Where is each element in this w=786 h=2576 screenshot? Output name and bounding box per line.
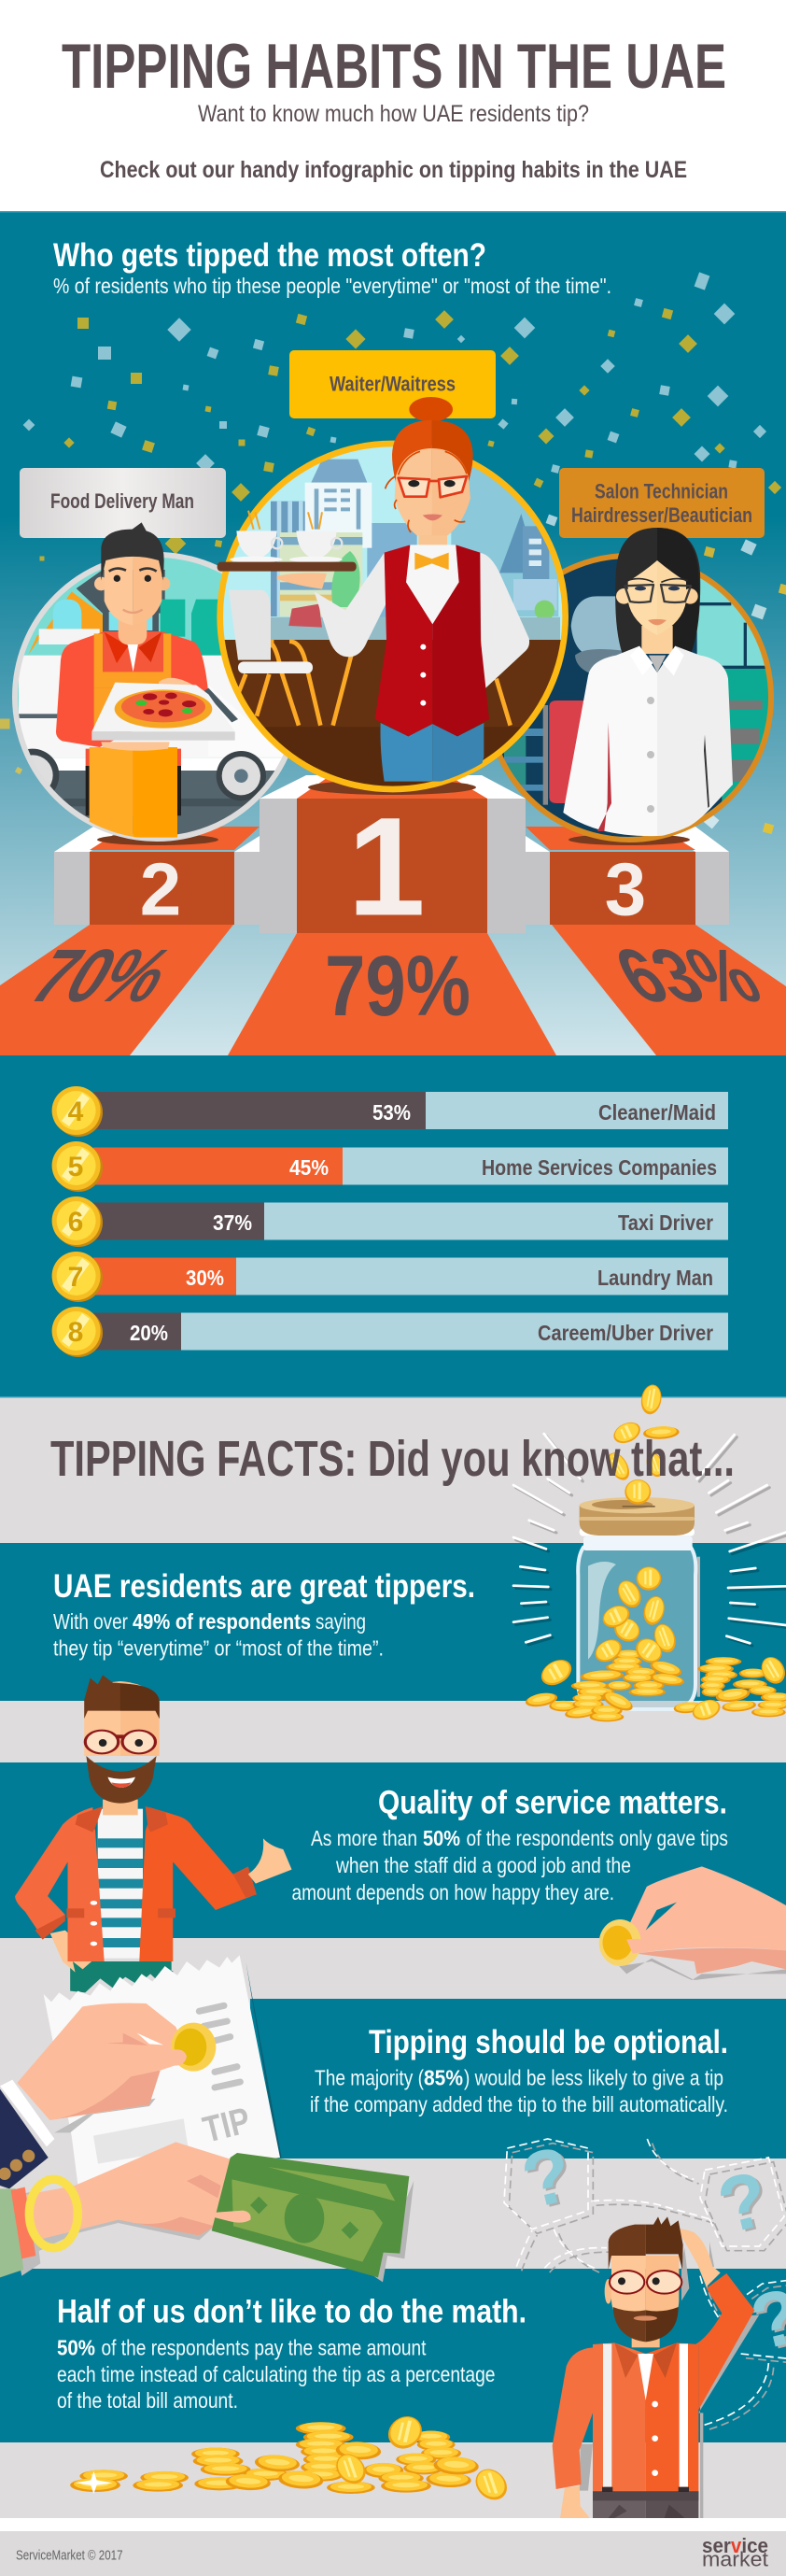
fact 4 text: of the respondents pay the same amount bbox=[101, 2335, 427, 2359]
bar row 6 bbox=[52, 1196, 728, 1247]
bar row 5: Home Services Companies bbox=[482, 1155, 717, 1180]
bar row 7: 30% bbox=[186, 1266, 224, 1290]
fact 3 text: 85% bbox=[424, 2066, 463, 2090]
illustration: coin jar bbox=[513, 1383, 786, 1723]
fact 3 heading: Tipping should be optional. bbox=[369, 2024, 728, 2060]
podium 1: 1 bbox=[347, 788, 426, 945]
carpet: centre bbox=[228, 933, 556, 1055]
fact 4 text: each time instead of calculating the tip as a percentage bbox=[57, 2362, 495, 2386]
panel: ranked bars background bbox=[0, 1055, 786, 1397]
fact 2 text: when the staff did a good job and the bbox=[335, 1853, 631, 1877]
illustration: thumbs-up man bbox=[15, 1675, 292, 1992]
fact 2 text: amount depends on how happy they are. bbox=[291, 1880, 614, 1904]
bar row 6: 6 bbox=[68, 1207, 83, 1238]
fact 2 text: As more than bbox=[311, 1826, 417, 1850]
label: waiter bbox=[289, 350, 496, 418]
intro line: Check out our handy infographic on tipping habits in the UAE bbox=[100, 157, 687, 183]
logo: servicemarket: market bbox=[702, 2548, 768, 2570]
label: salon: Salon Technician bbox=[595, 480, 728, 502]
fact 4 text: 50% bbox=[57, 2335, 95, 2359]
bar row 7: Laundry Man bbox=[597, 1266, 713, 1290]
illustration: salon technician bbox=[485, 528, 775, 843]
bar row 8: Careem/Uber Driver bbox=[538, 1321, 713, 1345]
illustration: hand holding coin bbox=[599, 1866, 786, 1980]
bar row 5 bbox=[52, 1141, 728, 1192]
bar row 8: 20% bbox=[130, 1321, 168, 1345]
bar row 8 bbox=[52, 1307, 728, 1357]
fact 1 heading: UAE residents are great tippers. bbox=[53, 1568, 475, 1605]
podium 3 bbox=[526, 827, 729, 930]
bar row 4: Cleaner/Maid bbox=[598, 1100, 716, 1125]
teal band: quality of service bbox=[0, 1762, 786, 1938]
illustration: waitress bbox=[215, 397, 569, 789]
podium 3: 3 bbox=[605, 848, 646, 930]
bar row 6: Taxi Driver bbox=[618, 1210, 713, 1235]
illustration: food delivery man bbox=[7, 522, 299, 841]
carpet: left bbox=[0, 925, 233, 1055]
podium 1 bbox=[260, 775, 526, 945]
percent 70: 70% bbox=[16, 935, 187, 1018]
label: waiter: Waiter/Waitress bbox=[330, 372, 456, 396]
illustration: coin pile bbox=[70, 2415, 512, 2501]
fact 2 text bbox=[291, 1826, 728, 1904]
panel: podium background bbox=[0, 211, 786, 1055]
fact 1 text: saying bbox=[316, 1609, 366, 1634]
illustration: scratching-head man bbox=[553, 2216, 759, 2518]
fact 3 text bbox=[310, 2066, 728, 2116]
podium 2 bbox=[54, 827, 260, 930]
fact 1 text: 49% of respondents bbox=[133, 1609, 311, 1634]
logo: servicemarket: service bbox=[702, 2534, 768, 2557]
fact 2 heading: Quality of service matters. bbox=[378, 1784, 727, 1821]
bar row 7: 7 bbox=[68, 1262, 83, 1293]
carpet: right bbox=[552, 925, 786, 1055]
fact 2 text: of the respondents only gave tips bbox=[467, 1826, 728, 1850]
illustration: receipt and hands bbox=[0, 1955, 414, 2282]
fact 1 text: they tip “everytime” or “most of the time”. bbox=[53, 1636, 384, 1661]
bar row 4: 53% bbox=[372, 1100, 411, 1125]
illustration: question-mark hexagons: ? bbox=[709, 2155, 777, 2250]
fact 1 text: With over bbox=[53, 1609, 128, 1634]
bar row 6: 37% bbox=[213, 1210, 252, 1235]
subtitle: Want to know much how UAE residents tip? bbox=[198, 101, 589, 127]
footer credit: ServiceMarket © 2017 bbox=[16, 2548, 123, 2563]
fact 3 text: ) would be less likely to give a tip bbox=[464, 2066, 723, 2090]
confetti bbox=[0, 272, 786, 834]
illustration: question-mark hexagons: ? bbox=[516, 2131, 583, 2227]
heading: who gets tipped: Who gets tipped the most often? bbox=[53, 237, 486, 274]
fact 3 text: The majority ( bbox=[315, 2066, 424, 2090]
fact 4 heading: Half of us don’t like to do the math. bbox=[57, 2294, 526, 2329]
illustration: question-mark hexagons bbox=[504, 2130, 786, 2429]
label: salon bbox=[559, 468, 765, 538]
footer band bbox=[0, 2531, 786, 2576]
fact 4 text: of the total bill amount. bbox=[57, 2388, 238, 2413]
bar row 7 bbox=[52, 1252, 728, 1302]
subheading: who gets tipped: % of residents who tip these people "everytime" or "most of the time". bbox=[53, 274, 611, 298]
panel: facts background bbox=[0, 1397, 786, 2518]
bar row 4: 4 bbox=[68, 1097, 84, 1127]
teal band: math bbox=[0, 2269, 786, 2442]
label: food delivery: Food Delivery Man bbox=[50, 489, 194, 513]
bar row 5: 45% bbox=[289, 1155, 329, 1180]
rays bbox=[513, 1434, 786, 1646]
illustration: question-mark hexagons: ? bbox=[513, 2130, 581, 2225]
fact 1 text bbox=[53, 1609, 384, 1661]
teal band: optional bbox=[250, 1999, 786, 2158]
fact 2 text: 50% bbox=[423, 1826, 460, 1850]
bar row 5: 5 bbox=[68, 1152, 83, 1182]
illustration: receipt and hands: TIP bbox=[199, 2100, 254, 2151]
bar row 8: 8 bbox=[68, 1317, 83, 1348]
illustration: question-mark hexagons: ? bbox=[712, 2157, 779, 2252]
label: food delivery bbox=[20, 468, 226, 538]
percent 79: 79% bbox=[325, 939, 470, 1034]
fact 4 text bbox=[57, 2335, 495, 2413]
bar row 4 bbox=[52, 1086, 728, 1137]
logo: servicemarket bbox=[702, 2534, 768, 2570]
teal band: great tippers bbox=[0, 1543, 786, 1701]
podium 2: 2 bbox=[140, 848, 181, 930]
